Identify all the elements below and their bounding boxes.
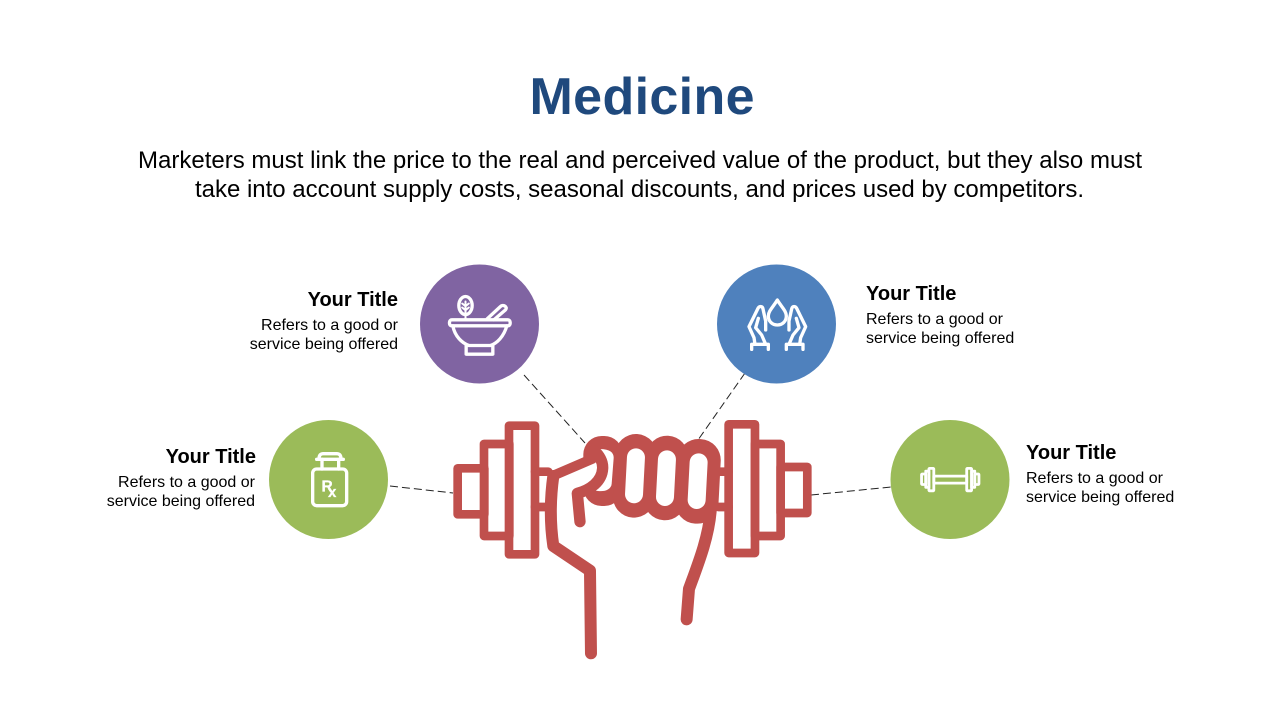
text: top left: Refers to a good or: [261, 317, 399, 334]
panel: top right: [717, 264, 1014, 384]
panel: top left: [250, 264, 539, 384]
text: bottom left: service being offered: [107, 493, 255, 510]
text: top left: service being offered: [250, 336, 398, 353]
text: bottom right: Refers to a good or: [1026, 470, 1164, 487]
purple circle with bowl icon: [420, 264, 539, 384]
intro text: take into account supply costs, seasonal discounts, and prices used by competitors.: [195, 176, 1084, 203]
text: top right: service being offered: [866, 330, 1014, 347]
text: bottom right: service being offered: [1026, 489, 1174, 506]
panel: bottom left: [107, 420, 388, 539]
text: top left: Your Title: [308, 289, 398, 311]
text: bottom left: Your Title: [166, 446, 256, 468]
green circle with bottle icon: [269, 420, 388, 539]
text: top left: [250, 289, 399, 353]
text: top right: Your Title: [866, 283, 956, 305]
icon: small dumbbell: [922, 468, 979, 491]
dashed connectors: [390, 373, 891, 495]
text: top right: Refers to a good or: [866, 311, 1004, 328]
text: bottom left: [107, 446, 256, 510]
left weight plates: [458, 426, 548, 554]
text: bottom right: [1026, 442, 1174, 506]
icon: fist gripping a dumbbell: [458, 424, 807, 653]
fist knuckles: [583, 433, 722, 525]
right wrist: [687, 512, 711, 619]
icon: water drop in hands: [749, 300, 806, 349]
finger gaps: [577, 448, 708, 509]
text: bottom left: Refers to a good or: [118, 474, 256, 491]
text: top right: [866, 283, 1014, 347]
icon: prescription bottle: [313, 454, 347, 506]
text: bottom right: Your Title: [1026, 442, 1116, 464]
green circle with bottle icon: x: [328, 484, 337, 501]
thumb and left wrist: [551, 476, 591, 653]
index finger: [577, 451, 603, 522]
green circle with dumbbell icon: [890, 420, 1010, 539]
icon: mortar and pestle bowl: [449, 296, 510, 354]
blue circle with hands icon: [717, 264, 836, 384]
title: Medicine: [530, 68, 754, 126]
intro text: Marketers must link the price to the real and perceived value of the product, but they also must: [138, 147, 1142, 174]
Rx label: R: [322, 478, 333, 496]
right weight plates: [718, 424, 807, 553]
panel: bottom right: [890, 420, 1174, 539]
intro text: [138, 147, 1142, 203]
